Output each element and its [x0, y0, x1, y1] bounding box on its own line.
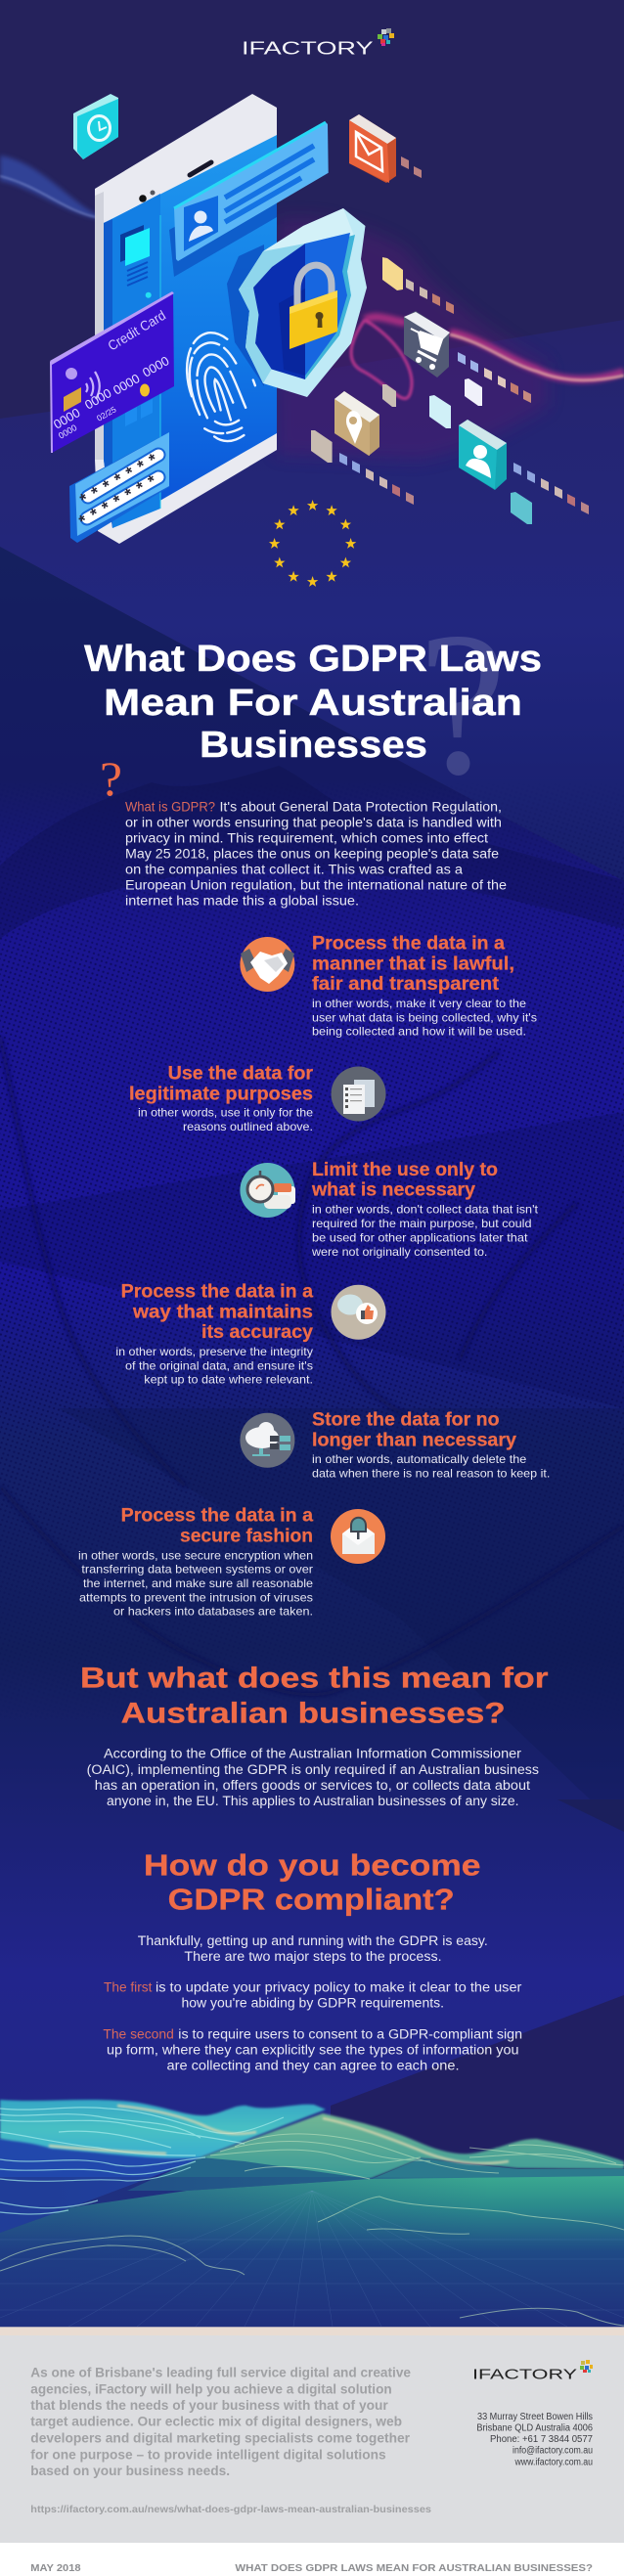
text: OAIC paragraph: According to the Office of the Australian Information Commissioner: [104, 1747, 522, 1761]
light wisps: [0, 155, 624, 460]
intro text: what is GDPR: It's about General Data Protection Regulation,: [219, 799, 502, 814]
icon: documents: [331, 1066, 385, 1121]
principle 2: legitimate purposes: [129, 1063, 385, 1133]
fingerprint: [179, 326, 266, 447]
logo: iFactory footer: [472, 2360, 593, 2383]
principle 5: store no longer than necessary: longer than necessary: [312, 1430, 516, 1450]
text: OAIC paragraph: anyone in, the EU. This applies to Australian businesses of any size.: [107, 1794, 518, 1808]
heading: how do you become compliant: [144, 1847, 481, 1917]
principle 5: store no longer than necessary: [240, 1409, 550, 1480]
principle 3: limit use: what is necessary: [311, 1180, 475, 1201]
logo: iFactory top: [242, 28, 394, 59]
icon: stopwatch and calendar: [240, 1163, 295, 1218]
credit card: 0000: [51, 405, 83, 432]
icon: contactless: [86, 372, 100, 399]
small data squares: pin: [339, 453, 414, 505]
credit card: Credit Card: [105, 307, 168, 354]
heading: what does this mean: But what does this mean for: [80, 1663, 549, 1695]
icon: cloud data: [240, 1413, 294, 1468]
footer about text: for one purpose – to provide intelligent digital solutions: [30, 2447, 386, 2462]
principle 2: legitimate purposes: reasons outlined above.: [183, 1120, 313, 1133]
intro text: what is GDPR: internet has made this a global issue.: [125, 893, 359, 908]
icon: shopping cart tile: [404, 311, 450, 378]
principle 1: lawful, fair and transparent: fair and transparent: [312, 974, 500, 995]
principle 5: store no longer than necessary: in other words, automatically delete the: [312, 1452, 527, 1466]
principle 2: legitimate purposes: Use the data for: [168, 1063, 314, 1084]
intro text: what is GDPR: on the companies that collect it. This was crafted as a: [125, 862, 464, 876]
footer about text: based on your business needs.: [30, 2464, 230, 2478]
text: compliance steps: There are two major steps to the process.: [184, 1949, 442, 1964]
principle 1: lawful, fair and transparent: user what data is being collected, why it's: [312, 1010, 537, 1024]
principle 6: secure fashion: secure fashion: [180, 1527, 313, 1547]
heading: what does this mean: Australian businesses?: [121, 1698, 506, 1730]
blank tiles: [311, 378, 482, 463]
credit card: 0000: [111, 371, 143, 398]
icon: user tile: [459, 420, 507, 490]
hero illustration: [0, 94, 624, 587]
principle 4: accuracy: [115, 1282, 386, 1387]
footer about text: target audience. Our eclectic mix of digital designers, web: [30, 2415, 402, 2429]
credit card: 0000: [82, 385, 114, 413]
profile card: [174, 122, 329, 261]
text: compliance steps: The second: [103, 2026, 174, 2041]
logo: iFactory top: IFACTORY: [242, 37, 374, 59]
logo: iFactory footer: IFACTORY: [472, 2367, 577, 2383]
intro text: what is GDPR: [125, 799, 507, 908]
footer about text: As one of Brisbane's leading full service digital and creative: [30, 2366, 411, 2380]
ground grid lines: [0, 2191, 624, 2327]
principle 6: secure fashion: in other words, use secure encryption when: [78, 1548, 313, 1562]
text: compliance steps: is to update your privacy policy to make it clear to the user: [156, 1980, 522, 1995]
icon: location pin tile: [334, 391, 379, 456]
text: OAIC paragraph: [87, 1747, 539, 1808]
title: Mean For Australian: [104, 683, 522, 724]
small data squares: mail: [401, 156, 422, 178]
principle 4: accuracy: its accuracy: [201, 1322, 313, 1343]
footer about text: [30, 2366, 411, 2478]
text: compliance steps: how you're abiding by GDPR requirements.: [182, 1996, 444, 2011]
icon: locked envelope: [331, 1509, 385, 1564]
yellow tile with squares: [382, 257, 454, 314]
padlock: [290, 265, 337, 349]
footer address: www.ifactory.com.au: [514, 2457, 593, 2467]
text: compliance steps: up form, where they can explicitly see the types of information you: [107, 2043, 518, 2058]
bottom bar: [30, 2562, 593, 2574]
principle 5: store no longer than necessary: data when there is no real reason to keep it.: [312, 1466, 550, 1480]
credit card: 0000: [140, 353, 172, 380]
title: [84, 639, 542, 766]
principle 6: secure fashion: Process the data in a: [121, 1506, 313, 1527]
heading: what does this mean: [80, 1663, 549, 1730]
text: compliance steps: [103, 1933, 522, 2073]
intro text: what is GDPR: or in other words ensuring that people's data is handled with: [125, 815, 502, 829]
principle 2: legitimate purposes: in other words, use it only for the: [138, 1106, 313, 1120]
orange question mark: ?: [100, 751, 122, 806]
password box: *******: [76, 450, 161, 509]
wave strands right: [0, 2134, 624, 2326]
principle 5: store no longer than necessary: Store the data for no: [312, 1409, 500, 1430]
EU stars: [269, 500, 356, 587]
icon: mail tile: [349, 114, 396, 183]
heading: how do you become compliant: GDPR compliant?: [168, 1883, 455, 1917]
wave highlight: [49, 2106, 509, 2163]
intro text: what is GDPR: privacy in mind. This requirement, which comes into effect: [125, 830, 488, 845]
footer address: 33 Murray Street Bowen Hills: [477, 2412, 593, 2422]
wave strands left: [0, 2108, 284, 2214]
credit card: 0000: [57, 422, 78, 441]
footer address: Phone: +61 7 3844 0577: [490, 2434, 593, 2445]
phone: [95, 94, 277, 544]
footer about text: developers and digital marketing specialists come together: [30, 2430, 411, 2445]
principle 6: secure fashion: transferring data between systems or over: [81, 1563, 313, 1577]
principle 6: secure fashion: or hackers into databases are taken.: [113, 1605, 313, 1619]
principle 2: legitimate purposes: legitimate purposes: [129, 1084, 313, 1104]
principle 3: limit use: required for the main purpose, but could: [312, 1217, 532, 1230]
icon: logo colour mark: [378, 28, 394, 46]
intro text: what is GDPR: European Union regulation, but the international nature of the: [125, 877, 507, 892]
principle 4: accuracy: way that maintains: [132, 1302, 313, 1322]
principle 1: lawful, fair and transparent: manner that is lawful,: [312, 954, 514, 974]
footer address: [476, 2412, 593, 2467]
principle 4: accuracy: kept up to date where relevant.: [144, 1373, 313, 1387]
principle 6: secure fashion: [78, 1506, 385, 1619]
icon: chat bubbles with thumb: [331, 1285, 385, 1340]
icon: clock tile: [73, 94, 118, 159]
text: compliance steps: is to require users to consent to a GDPR-compliant sign: [178, 2026, 522, 2041]
bottom bar: MAY 2018: [30, 2562, 81, 2574]
small data squares: user: [511, 463, 589, 524]
icon: handshake: [240, 937, 294, 992]
principle 3: limit use: in other words, don't collect data that isn't: [312, 1203, 539, 1217]
footer URL: https://ifactory.com.au/news/what-does-gdpr-laws-mean-australian-businesses: [30, 2504, 431, 2515]
phone speaker and cameras: [139, 162, 211, 202]
footer about text: that blends the needs of your business with that of your: [30, 2398, 388, 2413]
principle 4: accuracy: Process the data in a: [121, 1282, 313, 1303]
bottom bar: WHAT DOES GDPR LAWS MEAN FOR AUSTRALIAN BUSINESSES?: [235, 2562, 593, 2574]
shield with padlock: [227, 208, 367, 397]
heading: how do you become compliant: How do you become: [144, 1847, 481, 1882]
password box: [69, 432, 169, 543]
text: OAIC paragraph: has an operation in, offers goods or services to, or collects data about: [95, 1778, 530, 1793]
principle 1: lawful, fair and transparent: being collected and how it will be used.: [312, 1024, 526, 1038]
footer about text: agencies, iFactory will help you achieve a digital solution: [30, 2381, 392, 2396]
text: OAIC paragraph: (OAIC), implementing the GDPR is only required if an Australian business: [87, 1762, 539, 1777]
principle 4: accuracy: in other words, preserve the integrity: [115, 1345, 313, 1358]
intro text: what is GDPR: May 25 2018, places the onus on keeping people's data safe: [125, 846, 499, 861]
principle 6: secure fashion: attempts to prevent the intrusion of viruses: [79, 1590, 313, 1604]
password box: *******: [76, 471, 160, 530]
title: What Does GDPR Laws: [84, 639, 542, 680]
footer panel: [0, 2335, 624, 2543]
principle 3: limit use: were not originally consented to.: [311, 1245, 487, 1259]
small data squares: cart: [458, 352, 531, 403]
text: compliance steps: Thankfully, getting up and running with the GDPR is easy.: [138, 1933, 488, 1948]
principle 3: limit use: be used for other applications later that: [312, 1230, 528, 1244]
footer address: Brisbane QLD Australia 4006: [476, 2422, 593, 2433]
principle 3: limit use: [240, 1160, 539, 1259]
principle 3: limit use: Limit the use only to: [312, 1160, 498, 1180]
credit card: 02/25: [95, 404, 118, 423]
credit card: [50, 291, 174, 453]
principle 1: lawful, fair and transparent: Process the data in a: [312, 934, 505, 955]
principle 4: accuracy: of the original data, and ensure it's: [125, 1358, 313, 1372]
faint question mark: ?: [419, 591, 507, 818]
principle 1: lawful, fair and transparent: in other words, make it very clear to the: [312, 997, 526, 1010]
wireframe landscape: [0, 2100, 624, 2327]
title: Businesses: [200, 725, 427, 766]
footer address: info@ifactory.com.au: [513, 2446, 593, 2457]
principle 6: secure fashion: the internet, and make sure all reasonable: [83, 1577, 313, 1590]
text: compliance steps: The first: [104, 1980, 153, 1995]
text: compliance steps: are collecting and they can agree to each one.: [166, 2059, 460, 2073]
intro text: what is GDPR: What is GDPR?: [125, 799, 215, 814]
principle 1: lawful, fair and transparent: [240, 934, 537, 1038]
beige strip: [0, 2327, 624, 2335]
